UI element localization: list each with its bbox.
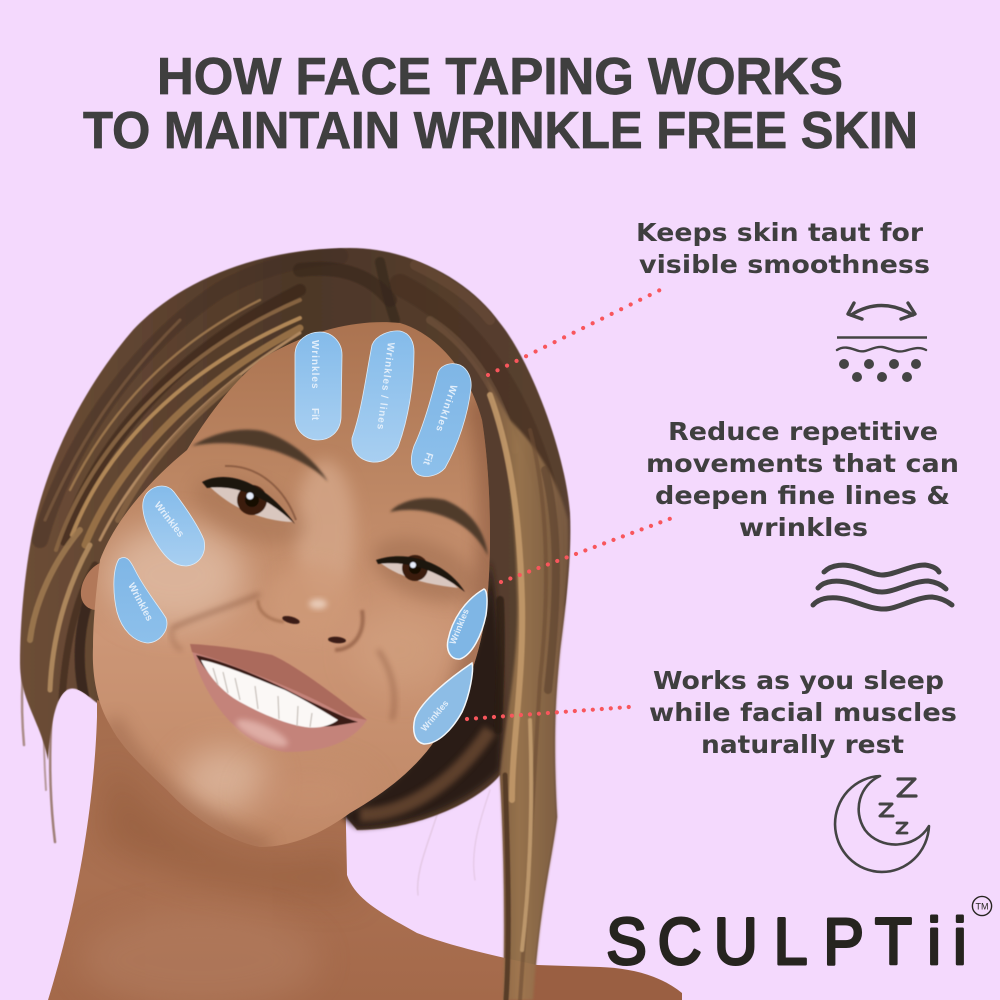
cheek tapes left: Wrinkles [125, 581, 155, 623]
nose [258, 564, 363, 650]
right eye [376, 555, 465, 592]
photo: smiling woman with face tapes [20, 248, 682, 1000]
left hair streaks [30, 256, 340, 700]
text block: works as you sleep [649, 666, 957, 759]
left eyebrow [192, 430, 328, 482]
cheek tapes right: Wrinkles [419, 698, 451, 733]
icon: moon and zzz [835, 776, 929, 872]
text block: reduce repetitive movements: deepen fine lines & [655, 481, 950, 510]
text block: keeps skin taut [636, 218, 930, 279]
dark hair behind right cheek and jaw [340, 560, 502, 828]
text block: works as you sleep: naturally rest [701, 730, 904, 759]
neck shading [96, 792, 354, 1000]
lips and teeth [190, 644, 367, 752]
forehead tapes: Wrinkles / lines [374, 342, 396, 431]
text block: works as you sleep: while facial muscles [649, 698, 957, 727]
icon: wavy wrinkle lines [813, 565, 952, 609]
strand detail lines [490, 395, 556, 1000]
right eyebrow [390, 498, 488, 556]
title: HOW FACE TAPING WORKS [157, 48, 843, 106]
left eye [202, 466, 296, 524]
forehead tapes: Wrinkles [433, 383, 459, 434]
hair mass [20, 248, 570, 1000]
icon: taut skin layers [837, 303, 927, 382]
text block: keeps skin taut: visible smoothness [639, 250, 930, 279]
front hair strand right [486, 378, 568, 1000]
dotted connector: cheek [501, 518, 672, 582]
cheek tapes right [414, 589, 487, 744]
smile folds [172, 594, 260, 628]
dotted connector: jaw [467, 707, 629, 719]
face shading and highlights [105, 400, 491, 850]
cheek tapes right: Wrinkles [448, 607, 471, 646]
dotted connector: forehead [488, 290, 660, 375]
logo: SCULPTii: SCULPTii [606, 906, 967, 979]
text block: reduce repetitive movements [646, 417, 959, 542]
text block: reduce repetitive movements: Reduce repetitive [668, 417, 938, 446]
cheek tapes left: Wrinkles [152, 500, 186, 540]
text block: reduce repetitive movements: movements that can [646, 449, 959, 478]
forehead tapes: Wrinkles [309, 340, 320, 390]
ear [81, 563, 102, 610]
cheek tapes left [114, 486, 205, 643]
right hair crown and strand [300, 262, 556, 600]
forehead tapes: Fit [420, 451, 435, 467]
face [93, 322, 490, 847]
neck and shoulders [48, 700, 505, 1000]
title: TO MAINTAIN WRINKLE FREE SKIN [83, 102, 918, 160]
title [83, 48, 918, 160]
trademark symbol [972, 896, 992, 916]
forehead tapes [295, 331, 471, 476]
text block: keeps skin taut: Keeps skin taut for [636, 218, 924, 247]
forehead tapes: Fit [309, 408, 320, 421]
teeth [201, 660, 338, 728]
text block: works as you sleep: Works as you sleep [653, 666, 944, 695]
trademark symbol: TM [976, 902, 988, 912]
hair wisps behind neck [22, 610, 490, 895]
text block: reduce repetitive movements: wrinkles [739, 513, 868, 542]
